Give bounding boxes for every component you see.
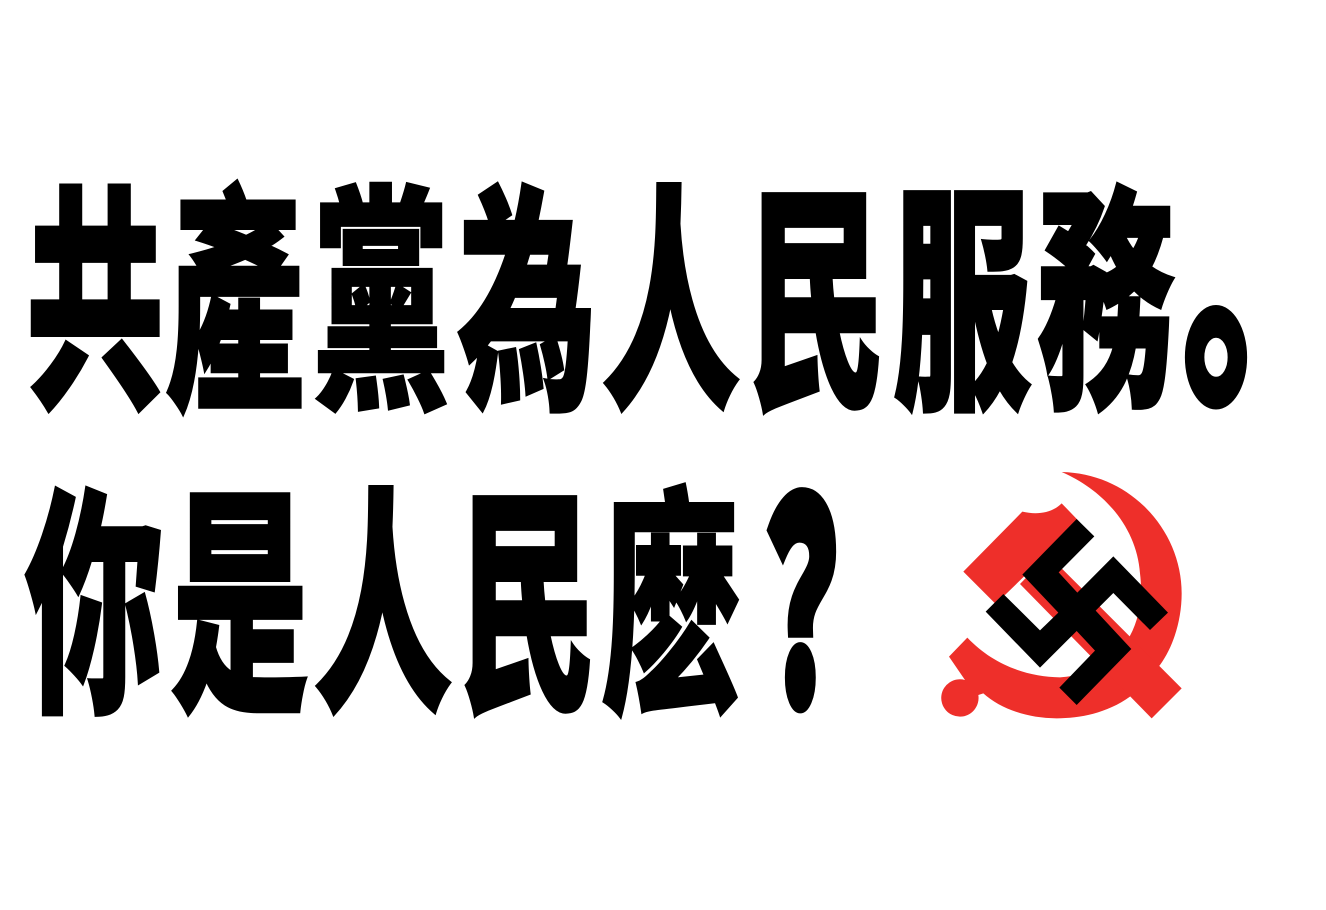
heading line 2: 人 [314,476,452,743]
heading line 1: 民 [748,173,886,440]
heading line 2: 民 [459,476,597,743]
heading line 1: 共 [26,173,164,440]
heading line 2: 是 [171,476,309,743]
heading line 2: 你 [25,476,163,743]
heading line 1: 人 [602,173,740,440]
heading line 1: 。 [1130,207,1301,528]
heading line 1: 產 [166,173,304,440]
hammer handle [1020,563,1182,718]
sickle [941,472,1182,718]
emblem: hammer and sickle with overlaid black symbol [941,472,1182,718]
heading line 2: 麽 [602,476,740,743]
hammer head [963,503,1080,604]
black symbol [986,519,1168,705]
heading line 1: 黨 [312,173,450,440]
heading line 1: 服 [893,173,1031,440]
heading line 1: 務 [1037,173,1175,440]
heading line 2: ？ [743,456,860,760]
heading line 1: 為 [458,173,596,440]
heading line 1 [26,173,1301,528]
heading line 2 [25,456,860,760]
